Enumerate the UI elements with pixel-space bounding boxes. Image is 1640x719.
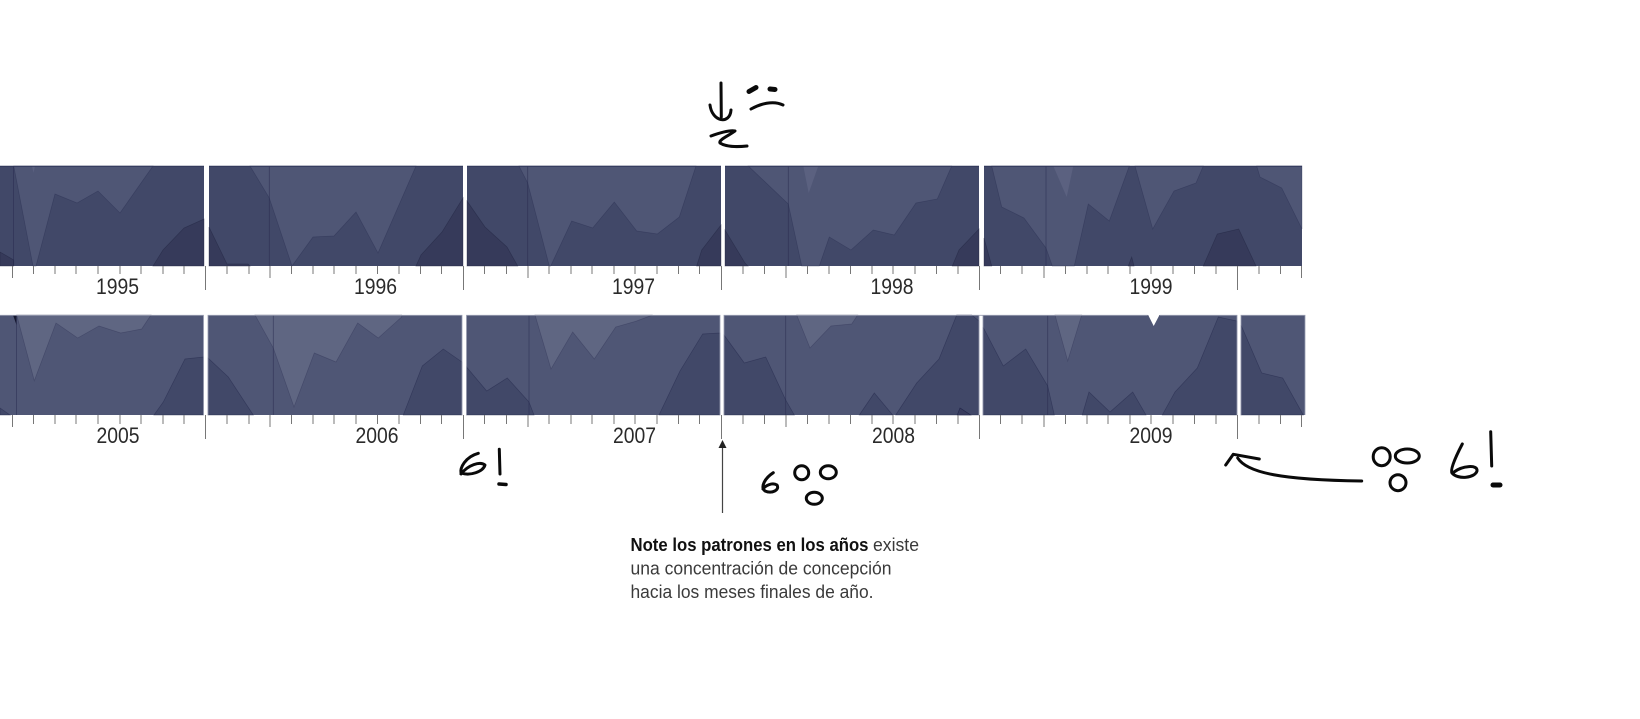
marker: white notch	[1148, 314, 1160, 326]
year labels: 1995-1999: 1997	[612, 274, 655, 299]
panel: 2006	[208, 315, 462, 415]
year labels: 2005-2009: 2008	[872, 423, 915, 448]
year labels: 2005-2009: 2006	[356, 423, 398, 448]
year labels: 1995-1999: 1999	[1130, 274, 1172, 299]
year labels: 2005-2009: 2007	[613, 423, 656, 448]
annotation text: hacia los meses finales de año.	[630, 582, 874, 602]
panel: 1996	[209, 166, 463, 266]
year labels: 1995-1999: 1996	[354, 274, 397, 299]
chart row: 2005-2010	[0, 314, 1305, 415]
panel: 1995	[0, 166, 204, 266]
year labels: 1995-1999: 1998	[870, 274, 914, 299]
panel: 1998	[725, 166, 979, 266]
handwritten: 600	[763, 466, 836, 504]
handwritten: down arrow, 2 and sad face	[710, 83, 783, 147]
panel: 1999	[984, 166, 1302, 266]
panel: 2008	[724, 315, 979, 415]
chart row: 1995-1999	[0, 166, 1302, 266]
panel: 2009	[983, 314, 1237, 415]
year labels: 1995-1999	[96, 274, 1172, 299]
annotation text	[630, 535, 919, 602]
year labels: 2005-2009	[96, 423, 1172, 448]
year labels: 2005-2009: 2009	[1130, 423, 1172, 448]
handwritten: 6! left	[461, 449, 506, 484]
axis ticks: 1995-1999	[12, 266, 1302, 290]
panel: 2007	[466, 315, 720, 415]
annotation text: una concentración de concepción	[630, 558, 892, 578]
panel: 2010 partial	[1241, 315, 1305, 415]
axis ticks: 2005-2010	[12, 415, 1302, 439]
annotation text: Note los patrones en los años	[630, 535, 868, 555]
panel: 1997	[467, 166, 721, 266]
year labels: 2005-2009: 2005	[96, 423, 140, 448]
arrow: points up to the 2007 boundary	[718, 440, 726, 513]
annotation text: existe	[873, 535, 919, 555]
handwritten: arrow toward 2009 and 600 6!	[1226, 432, 1500, 491]
year labels: 1995-1999: 1995	[96, 274, 139, 299]
panel: 2005	[0, 315, 204, 415]
